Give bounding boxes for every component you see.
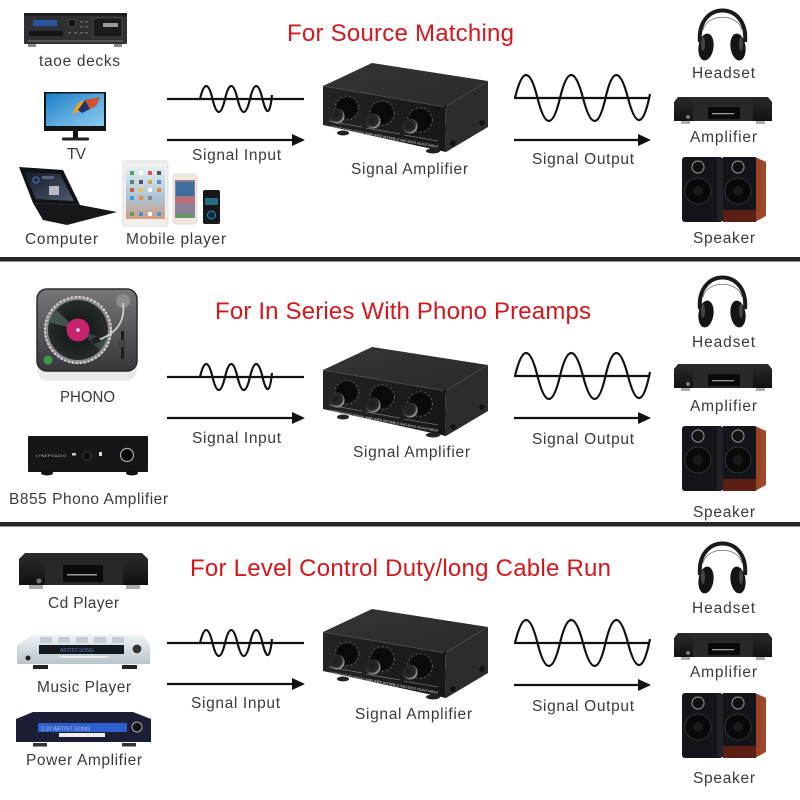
icon: speakers	[682, 693, 766, 758]
label: signal output: Signal Output	[532, 431, 635, 448]
title: level control duty: For Level Control Duty/long Cable Run	[190, 555, 611, 582]
icon: signal amplifier: FRONT AUDIO SIGNAL AMPLIFIER W/TREBLE AND BASS ADJUSTMENT	[330, 125, 439, 149]
signal output wave and arrow	[514, 620, 651, 691]
icon: laptop	[19, 167, 117, 225]
signal input wave and arrow	[167, 86, 305, 146]
icon: headset	[697, 10, 747, 61]
icon: cd player	[19, 553, 148, 589]
label: music player: Music Player	[37, 679, 131, 696]
icon: power amplifier: 2-37 ARTIST-SONG	[41, 726, 90, 732]
label: amplifier: Amplifier	[690, 664, 757, 681]
icon: signal amplifier	[323, 63, 488, 154]
label: mobile player: Mobile player	[126, 231, 226, 248]
panel: phono preamps	[9, 278, 772, 521]
label: speaker: Speaker	[693, 504, 755, 521]
label: headset: Headset	[692, 600, 756, 617]
icon: amplifier	[674, 633, 772, 660]
panel: source matching	[19, 10, 772, 248]
label: phono: PHONO	[60, 389, 115, 406]
label: signal output: Signal Output	[532, 698, 635, 715]
panel: level control	[16, 544, 772, 787]
signal input wave and arrow	[167, 630, 305, 690]
divider	[0, 522, 800, 526]
icon: tv	[44, 92, 106, 140]
icon: mobile devices	[123, 161, 220, 226]
icon: amplifier	[674, 97, 772, 124]
label: headset: Headset	[692, 65, 756, 82]
label: computer: Computer	[25, 231, 98, 248]
label: signal input: Signal Input	[191, 695, 281, 712]
icon: b855 phono amplifier	[28, 436, 148, 476]
signal output wave and arrow	[514, 353, 651, 424]
icon: signal amplifier	[323, 347, 488, 438]
icon: music player: ARTIST-SONG	[60, 648, 94, 654]
icon: headset	[697, 278, 747, 328]
signal output wave and arrow	[514, 75, 651, 146]
label: signal input: Signal Input	[192, 147, 282, 164]
icon: signal amplifier	[323, 609, 488, 700]
signal input wave and arrow	[167, 364, 305, 424]
label: speaker: Speaker	[693, 230, 755, 247]
icon: tape deck	[24, 13, 127, 47]
icon: power amplifier	[16, 712, 151, 746]
icon: turntable	[37, 289, 137, 381]
label: taoe decks: taoe decks	[39, 53, 120, 70]
label: signal amplifier: Signal Amplifier	[351, 161, 468, 178]
icon: speakers	[682, 157, 766, 222]
icon: amplifier	[674, 364, 772, 391]
icon: signal amplifier: FRONT AUDIO SIGNAL AMPLIFIER W/TREBLE AND BASS ADJUSTMENT	[330, 409, 439, 433]
label: b855 phono amplifier: B855 Phono Amplifier	[9, 491, 168, 508]
label: amplifier: Amplifier	[690, 398, 757, 415]
label: tv: TV	[67, 146, 87, 163]
label: signal amplifier: Signal Amplifier	[353, 444, 470, 461]
title: in series with phono preamps: For In Series With Phono Preamps	[215, 298, 591, 325]
label: amplifier: Amplifier	[690, 129, 757, 146]
icon: music player	[17, 635, 150, 669]
icon: speakers	[682, 426, 766, 491]
icon: signal amplifier: FRONT AUDIO SIGNAL AMPLIFIER W/TREBLE AND BASS ADJUSTMENT	[330, 671, 439, 695]
label: speaker: Speaker	[693, 770, 755, 787]
icon: headset	[697, 544, 747, 594]
title: for source matching: For Source Matching	[287, 20, 514, 47]
label: headset: Headset	[692, 334, 756, 351]
label: power amplifier: Power Amplifier	[26, 752, 142, 769]
label: cd player: Cd Player	[48, 595, 119, 612]
label: signal input: Signal Input	[192, 430, 282, 447]
icon: b855 phono amplifier: LYNEPOUDIO	[36, 454, 66, 458]
divider	[0, 257, 800, 262]
label: signal output: Signal Output	[532, 151, 635, 168]
label: signal amplifier: Signal Amplifier	[355, 706, 472, 723]
